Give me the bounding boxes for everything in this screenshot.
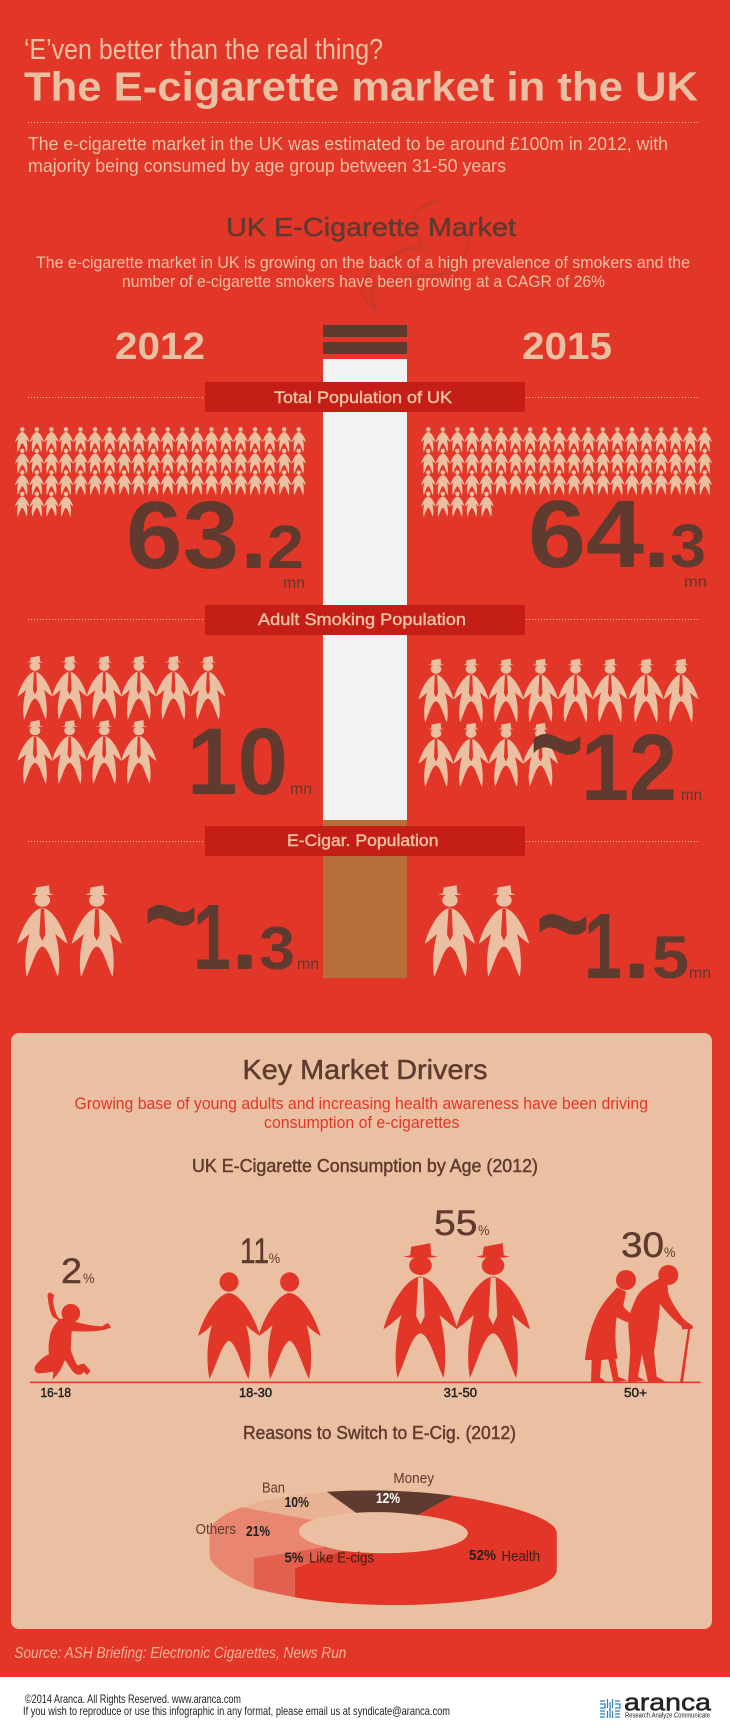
stat: ~1.3 mn: mn: [297, 956, 319, 973]
stat: 64.3 mn: 64: [528, 481, 644, 588]
percentage: 11%: %: [269, 1250, 280, 1266]
label: Money 12%: [376, 1470, 434, 1507]
stat: ~1.3 mn: 1: [193, 885, 231, 989]
people grid: total population 2015: [421, 427, 712, 517]
label: Others 21%: [196, 1521, 270, 1540]
icon: smoke swirl: [362, 201, 469, 312]
age labels: [40, 1385, 647, 1400]
stat: ~1.5 mn: 5: [652, 924, 689, 991]
banner: Total Population of UK: Total Population of UK: [274, 388, 453, 407]
percentage: 2%: %: [83, 1270, 94, 1286]
banner: Total Population of UK: [205, 382, 525, 412]
stat: 10 mn: 10: [187, 709, 288, 815]
label: 52% Health: 52%: [469, 1547, 496, 1564]
banner: Adult Smoking Population: [205, 605, 525, 635]
heading: reasons to switch: Reasons to Switch to E-Cig. (2012): [243, 1422, 516, 1443]
year: 2015: 2015: [522, 326, 612, 368]
icon: jumping teen 16-18: [35, 1292, 111, 1379]
stat: 63.2 mn: 2: [267, 513, 304, 581]
percentage: 2%: 2: [61, 1252, 82, 1291]
banner: Adult Smoking Population: Adult Smoking Population: [258, 610, 466, 629]
axis line: [30, 1382, 701, 1383]
stat: 10 mn: mn: [290, 781, 312, 798]
label: 52% Health: Health: [501, 1548, 540, 1565]
icon: elderly couple 50+: [585, 1265, 693, 1382]
logo wordmark: Research.Analyze.Communicate: [625, 1712, 710, 1720]
people: e-cigarette users 2015: [425, 885, 529, 977]
label: Ban 10%: Ban: [262, 1480, 285, 1497]
segment: like e-cigs 5%: [254, 1547, 342, 1597]
source note: Source: ASH Briefing: Electronic Cigarettes, News Run: [14, 1645, 346, 1662]
stat: ~12 mn: mn: [681, 787, 702, 804]
stat: ~12 mn: 12: [581, 715, 677, 821]
intro text: [28, 133, 668, 176]
age labels: 50+: [624, 1385, 647, 1400]
segment: money 12%: [327, 1490, 453, 1515]
donut chart: reasons to switch: [196, 1470, 557, 1605]
stat: 63.2 mn: [126, 482, 305, 592]
copyright text: [23, 1692, 450, 1718]
stat: ~1.3 mn: ~: [144, 841, 198, 988]
icon: men with hats 31-50: [384, 1243, 530, 1378]
stat: 63.2 mn: .: [244, 503, 263, 581]
stat: 64.3 mn: mn: [684, 574, 707, 591]
market description: The e-cigarette market in UK is growing on the back of a high prevalence of smokers and the: [36, 254, 690, 272]
label: 5% Like E-cigs: [284, 1550, 374, 1567]
percentage: 55%: %: [478, 1222, 490, 1238]
title: The E-cigarette market in the UK: [24, 64, 698, 110]
percentage: 2%: [61, 1252, 94, 1291]
intro text: The e-cigarette market in the UK was estimated to be around £100m in 2012, with: [28, 133, 668, 154]
heading: consumption by age: UK E-Cigarette Consumption by Age (2012): [192, 1155, 538, 1176]
logo wordmark: aranca: [624, 1690, 712, 1717]
stat: 64.3 mn: .: [647, 502, 666, 580]
stat: 63.2 mn: mn: [283, 575, 305, 592]
heading: UK E-Cigarette Market: UK E-Cigarette Market: [226, 212, 517, 242]
banner: E-Cigar. Population: E-Cigar. Population: [287, 831, 438, 850]
stat: 64.3 mn: [528, 481, 707, 591]
icon: aranca logo mark: [600, 1699, 620, 1718]
stat: ~12 mn: ~: [530, 670, 584, 817]
heading: Key Market Drivers: Key Market Drivers: [242, 1054, 488, 1085]
people grid: total population 2012: [15, 427, 306, 517]
stat: 64.3 mn: 3: [670, 512, 706, 580]
percentage: 30%: %: [664, 1244, 676, 1260]
stat: ~1.5 mn: 1: [584, 894, 622, 998]
age labels: 18-30: [239, 1385, 272, 1400]
label: 5% Like E-cigs: Like E-cigs: [309, 1550, 374, 1567]
people: e-cigarette users 2012: [17, 885, 122, 977]
cigarette graphic: [323, 325, 407, 978]
footer: [0, 1677, 730, 1736]
label: Ban 10%: 10%: [284, 1494, 309, 1511]
label: Money 12%: 12%: [376, 1490, 400, 1507]
label: Others 21%: 21%: [246, 1523, 270, 1540]
stat: ~1.3 mn: 3: [259, 915, 295, 982]
label: Money 12%: Money: [393, 1470, 434, 1487]
segment: others 21%: [210, 1507, 326, 1588]
stat: ~1.5 mn: ~: [536, 850, 590, 997]
banner: E-Cigar. Population: [205, 826, 525, 856]
segment: ban 10%: [242, 1492, 356, 1520]
percentage: 11%: 11: [240, 1232, 269, 1271]
age labels: 31-50: [444, 1385, 477, 1400]
stat: ~1.5 mn: .: [627, 913, 646, 991]
people: adult smokers 2012: [17, 656, 226, 784]
label: Ban 10%: [262, 1480, 309, 1511]
stat: ~12 mn: [530, 670, 702, 821]
stat: ~1.5 mn: mn: [689, 965, 711, 982]
icon: couple 18-30: [198, 1272, 321, 1379]
market description: [36, 254, 690, 291]
stat: ~1.3 mn: [144, 841, 319, 989]
drivers description: Growing base of young adults and increasing health awareness have been driving: [74, 1095, 648, 1113]
label: 5% Like E-cigs: 5%: [284, 1550, 304, 1567]
age labels: 16-18: [40, 1385, 71, 1400]
label: Others 21%: Others: [196, 1521, 236, 1538]
label: 52% Health: [469, 1547, 540, 1565]
percentage: 55%: 55: [434, 1204, 478, 1243]
people: adult smokers 2015: [418, 659, 699, 787]
stat: ~1.3 mn: .: [235, 904, 254, 982]
stat: ~1.5 mn: [536, 850, 711, 998]
subtitle: ‘E’ven better than the real thing?: [24, 34, 383, 66]
year: 2012: 2012: [115, 326, 205, 368]
copyright text: ©2014 Aranca. All Rights Reserved. www.aranca.com: [25, 1692, 241, 1706]
market description: number of e-cigarette smokers have been growing at a CAGR of 26%: [122, 273, 605, 291]
stat: 63.2 mn: 63: [126, 482, 239, 589]
drivers description: consumption of e-cigarettes: [264, 1114, 460, 1132]
intro text: majority being consumed by age group between 31-50 years: [28, 155, 506, 176]
copyright text: If you wish to reproduce or use this infographic in any format, please email us at syndicate@aranca.com: [23, 1704, 450, 1718]
segment: health 52%: [295, 1496, 557, 1605]
drivers description: [74, 1095, 648, 1132]
percentage: 30%: 30: [621, 1226, 664, 1265]
panel: key market drivers: [11, 1033, 712, 1629]
